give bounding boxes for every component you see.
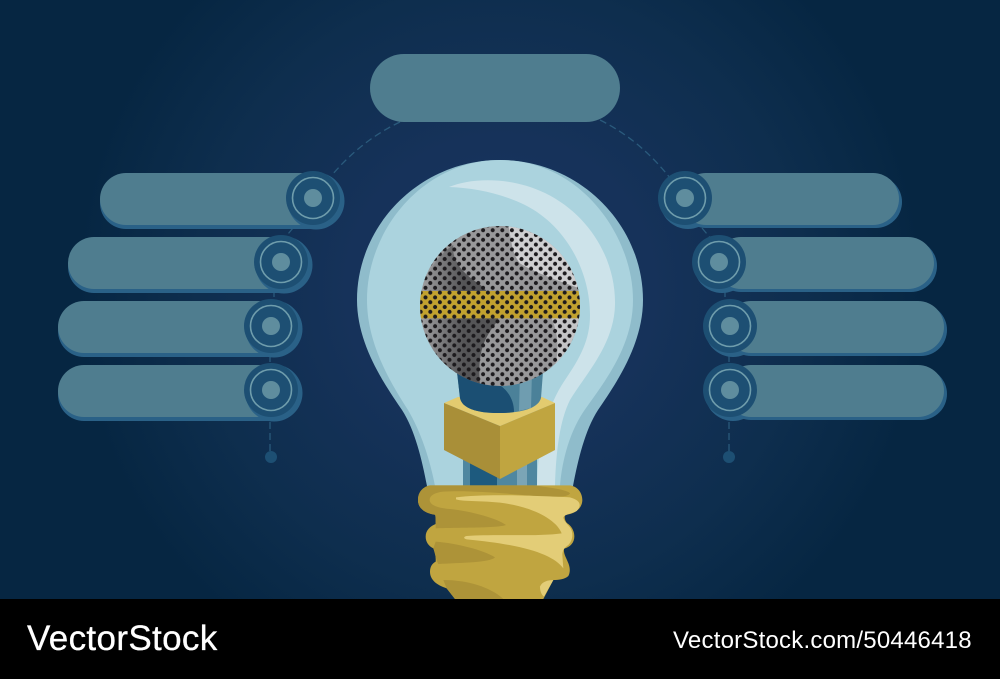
top pill <box>370 54 620 122</box>
dot: left line end <box>265 451 277 463</box>
cube right face <box>500 403 555 479</box>
halftone sphere <box>420 225 580 386</box>
dashed connector lines <box>270 120 729 452</box>
left pill 3 <box>58 299 302 358</box>
right pill 3 <box>703 299 947 357</box>
footer bar <box>0 599 1000 679</box>
dot: right line end <box>723 451 735 463</box>
right pill 2 <box>692 235 937 293</box>
cube left face <box>444 403 500 479</box>
cube top face <box>444 397 555 426</box>
right pill 4 <box>703 363 947 421</box>
right pill 1 <box>658 171 902 229</box>
filament stem upper <box>457 372 543 413</box>
url text: VectorStock.com/50446418 <box>673 627 972 654</box>
light bulb glass <box>357 160 643 486</box>
filament stem lower <box>463 450 537 486</box>
screw base <box>418 485 582 599</box>
left pill 1 <box>100 171 344 230</box>
left pill 4 <box>58 363 302 422</box>
logo text: VectorStock <box>27 619 218 658</box>
left pill 2 <box>68 235 312 294</box>
